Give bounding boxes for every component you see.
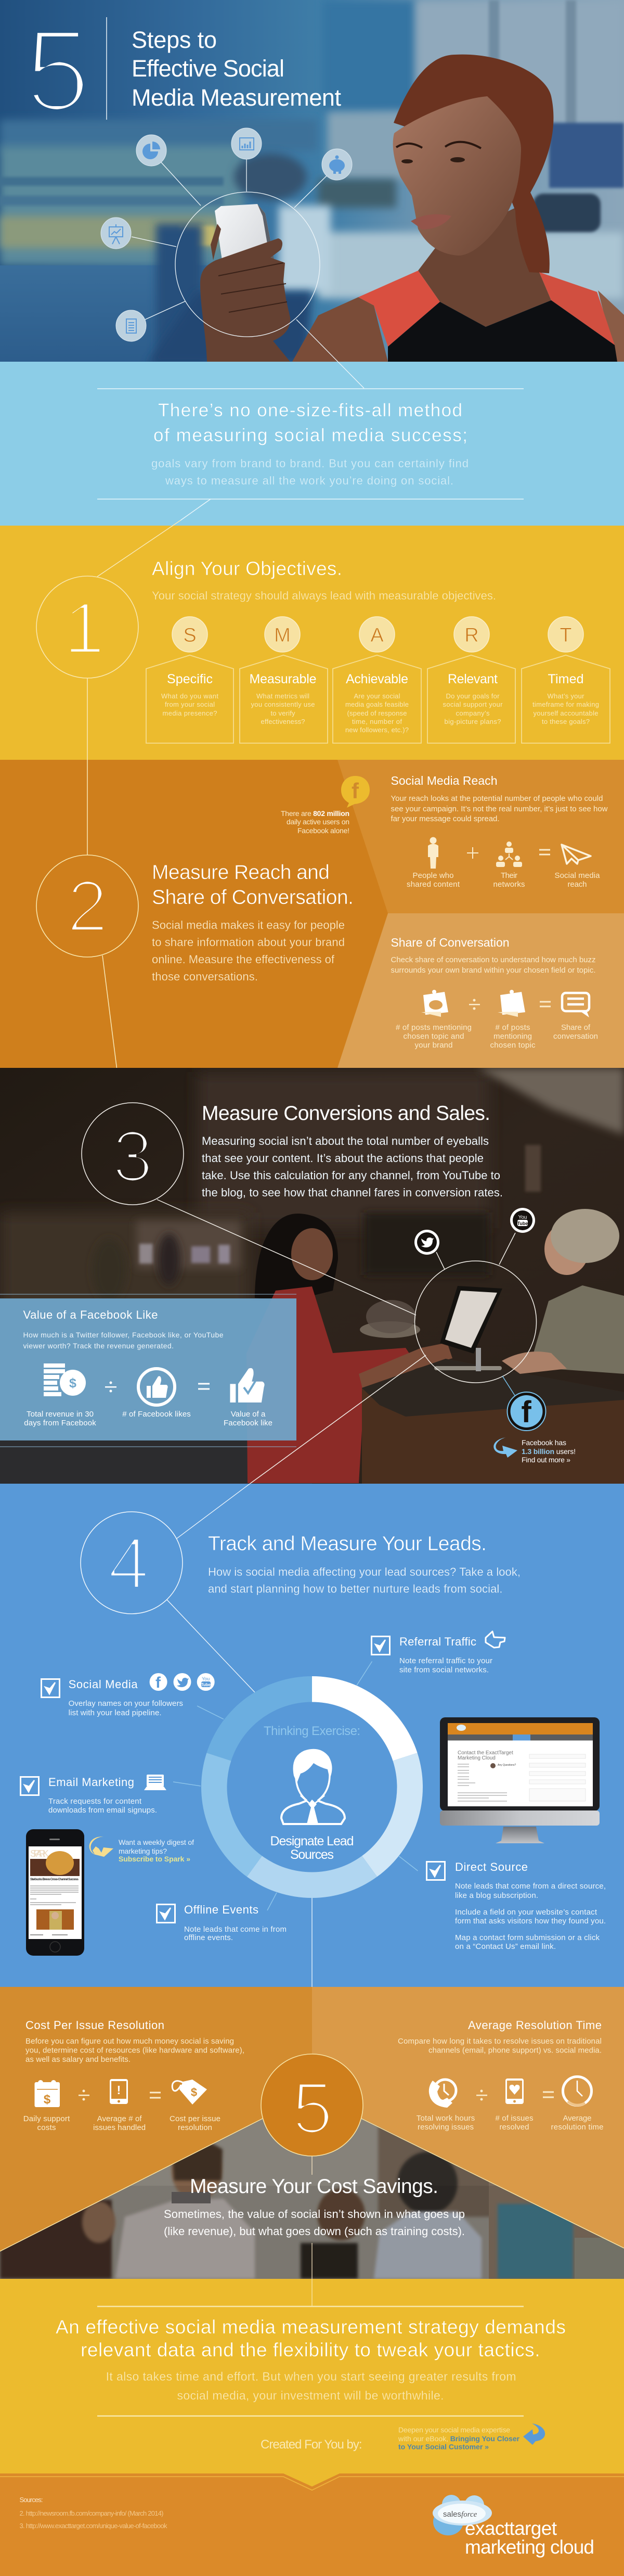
intro text block: goals vary from brand to brand. But you can certainly find — [151, 457, 469, 470]
panel: section 2 background — [0, 760, 624, 1068]
panel: value of a facebook like — [0, 1294, 296, 1447]
SMART card: specific: Specific — [167, 672, 213, 686]
callout: ebook: with our eBook, Bringing You Closer — [398, 2434, 520, 2443]
formula labels — [24, 1410, 272, 1427]
panel: section 4 background — [0, 1484, 624, 1987]
mockup: smartphone with newsletter: SPARK — [30, 1848, 49, 1859]
lead source: referral traffic: Note referral traffic to your — [399, 1656, 492, 1665]
icon: pointing hand — [486, 1631, 505, 1648]
lead source: social media: list with your lead pipeline. — [69, 1708, 162, 1717]
icon: note with cloud — [421, 990, 448, 1017]
operator: divide — [476, 2090, 487, 2100]
callout: facebook has 1.3 billion users — [493, 1437, 576, 1464]
callout: facebook has 1.3 billion users: Facebook has — [522, 1438, 566, 1447]
photo: team at whiteboard — [0, 2118, 624, 2279]
connector: centre line — [311, 2156, 313, 2307]
step 2 number circle: 2 — [67, 865, 108, 947]
text: section 2 intro: Social media makes it easy for people — [152, 919, 345, 932]
photo subject: customer in red coat — [246, 1214, 452, 1483]
formula labels — [407, 871, 600, 889]
formula labels: networks — [493, 880, 525, 889]
panel: value of a facebook like: viewer worth? Track the revenue generated. — [23, 1342, 174, 1350]
lead source: direct source: Direct Source — [455, 1860, 528, 1873]
lead source: email marketing — [21, 1775, 201, 1815]
text: designate lead sources — [270, 1834, 354, 1862]
formula labels: # of Facebook likes — [122, 1410, 191, 1419]
icon: clock — [563, 2076, 592, 2106]
logo: salesforce exacttarget marketing cloud: salesforce — [443, 2510, 477, 2519]
formula labels: conversation — [553, 1032, 598, 1041]
icon: business person — [281, 1749, 345, 1824]
callout: facebook has 1.3 billion users: Find out more » — [522, 1456, 570, 1464]
panel: value of a facebook like: Value of a Facebook Like — [23, 1308, 158, 1321]
SMART card: achievable: (speed of response — [347, 709, 407, 717]
step 2 number circle — [36, 855, 138, 957]
text: section 2 intro — [152, 919, 345, 983]
diagonal line right of photo — [361, 2119, 624, 2248]
title: Steps to — [132, 27, 217, 53]
checkbox — [426, 1862, 445, 1880]
callout: spark subscribe: Subscribe to Spark » — [119, 1855, 190, 1863]
panel: average resolution time: channels (email, phone support) vs. social media. — [428, 2046, 602, 2055]
lead source: offline events: Offline Events — [184, 1903, 258, 1916]
icon: twitter — [414, 1230, 439, 1255]
panel: section 1 background — [0, 526, 624, 760]
title: Media Measurement — [132, 84, 341, 111]
icon: youtube: You — [518, 1215, 527, 1220]
formula labels: mentioning — [493, 1032, 532, 1041]
operator: equals — [540, 1002, 551, 1006]
step 1 number circle — [36, 576, 138, 678]
chart: five lead-source donut ring — [201, 1676, 423, 1898]
photo subject: tablet on stand — [440, 1286, 502, 1371]
formula labels: costs — [37, 2123, 56, 2132]
icon: thumbs up in circle — [138, 1369, 175, 1405]
connector lines between hero and step 2 — [87, 499, 211, 1103]
panel: average resolution time: Average Resolution Time — [468, 2019, 602, 2032]
heading: track and measure: Track and Measure Your Leads. — [208, 1533, 487, 1555]
diagonal line left of photo — [0, 2119, 263, 2251]
heading: measure reach: Share of Conversation. — [152, 886, 354, 909]
connector: closing centre line — [311, 2279, 313, 2307]
formula labels: Total revenue in 30 — [27, 1410, 94, 1419]
photo subject: phone held in hand — [200, 204, 290, 362]
lead source: referral traffic: Referral Traffic — [399, 1635, 476, 1648]
icon: laptop — [144, 1775, 166, 1790]
step 4 number circle — [81, 1512, 183, 1614]
SMART card: relevant: company’s — [456, 709, 490, 717]
SMART letter circles — [172, 617, 583, 652]
text: section 5 intro: (like revenue), but what goes down (such as training costs). — [164, 2225, 465, 2238]
photo subject: barista — [502, 1209, 624, 1374]
text: section 3 intro: Measuring social isn’t about the total number of eyeballs — [202, 1134, 489, 1147]
SMART card: achievable: new followers, etc.)? — [345, 726, 409, 734]
lead source: offline events: offline events. — [184, 1933, 233, 1942]
callout: facebook users: There are 802 million — [281, 809, 349, 818]
checkbox — [157, 1905, 175, 1922]
title — [25, 5, 341, 136]
text: section 2 intro: online. Measure the effectiveness of — [152, 953, 335, 966]
lead source: direct source: like a blog subscription. — [455, 1891, 538, 1900]
SMART card: relevant: Relevant — [448, 672, 498, 686]
operator: divide — [105, 1381, 116, 1393]
logo: salesforce exacttarget marketing cloud — [433, 2495, 594, 2558]
lead source: social media — [42, 1673, 224, 1719]
SMART card: measurable: Measurable — [250, 672, 316, 686]
callout: ebook: Deepen your social media expertise — [398, 2426, 510, 2434]
SMART card: timed: Timed — [548, 672, 583, 686]
icon: phone with alert — [110, 2079, 128, 2104]
formula labels: days from Facebook — [24, 1419, 96, 1427]
icon: piggy bank — [322, 149, 352, 180]
icon: clipboard — [116, 310, 146, 341]
operator: divide — [469, 999, 480, 1010]
icon: stack of coins: $ — [69, 1376, 76, 1391]
formula labels: issues handled — [93, 2123, 146, 2132]
panel: social media reach: Your reach looks at the potential number of people who could — [391, 794, 603, 803]
text: closing statement: An effective social media measurement strategy demands — [56, 2316, 566, 2338]
SMART letter circles: S — [183, 624, 197, 646]
SMART card: timed: What’s your — [547, 692, 584, 700]
formula labels: # of posts mentioning — [396, 1023, 472, 1032]
icon: network of people — [496, 841, 522, 867]
icon: youtube — [197, 1673, 215, 1691]
step 4 number circle: 4 — [108, 1522, 149, 1604]
heading: measure reach — [152, 861, 354, 909]
SMART card: relevant: Do your goals for — [446, 692, 500, 700]
formula labels: Average # of — [97, 2114, 142, 2123]
formula labels: Their — [501, 871, 517, 880]
SMART card: relevant: big-picture plans? — [444, 718, 501, 725]
text: section 5 intro: Sometimes, the value of social isn’t shown in what goes up — [164, 2208, 465, 2221]
panel: average resolution time — [398, 2019, 603, 2132]
text: designate lead sources: Sources — [290, 1847, 334, 1862]
callout: facebook users — [281, 776, 370, 835]
text: section 3 intro: that see your content. It’s about the actions that people — [202, 1152, 484, 1165]
diagram: tablet circle and connectors — [157, 1200, 537, 1483]
formula labels: your brand — [415, 1041, 452, 1050]
icon: youtube — [510, 1208, 535, 1233]
SMART card: achievable: Achievable — [346, 672, 408, 686]
intro text block: ways to measure all the work you’re doing on social. — [165, 474, 453, 487]
panel: social media reach: Social Media Reach — [391, 774, 497, 787]
icon: presentation board — [101, 218, 131, 249]
formula labels: chosen topic and — [404, 1032, 464, 1041]
text: closing statement: relevant data and the flexibility to tweak your tactics. — [81, 2339, 540, 2361]
formula labels: Daily support — [23, 2114, 70, 2123]
SMART card: specific: media presence? — [162, 709, 217, 717]
heading: align your objectives: Align Your Objectives. — [152, 558, 342, 579]
intro text block — [97, 389, 524, 499]
panel: closing band — [0, 2279, 624, 2486]
callout: ebook — [398, 2424, 545, 2451]
SMART letter circles: M — [274, 624, 291, 646]
icon: thumbs up with check — [230, 1368, 265, 1402]
formula labels: Total work hours — [417, 2114, 475, 2123]
icon: youtube: Tube — [517, 1221, 528, 1226]
SMART card: achievable — [333, 655, 421, 743]
step 1 number circle: 1 — [64, 587, 105, 669]
text: section 3 intro: take. Use this calculation for any channel, from YouTube to — [202, 1169, 500, 1182]
step 5 number circle: 5 — [292, 2067, 333, 2149]
icon: facebook: f — [155, 1674, 161, 1691]
arrow: yellow to newsletter — [89, 1837, 113, 1857]
text: section 3 intro: the blog, to see how that channel fares in conversion rates. — [202, 1186, 503, 1199]
panel: cost per issue resolution: Before you can figure out how much money social is saving — [25, 2037, 234, 2046]
step 5 number circle — [261, 2054, 363, 2156]
SMART card: measurable: to verify — [270, 709, 295, 717]
formula labels — [23, 2114, 220, 2132]
panel: cost per issue resolution: you, determine cost of resources (like hardware and software), — [25, 2046, 244, 2055]
formula labels: shared content — [407, 880, 460, 889]
SMART letter circles: A — [370, 624, 384, 646]
formula labels: chosen topic — [490, 1041, 536, 1050]
formula labels — [417, 2114, 603, 2132]
SMART card: measurable: effectiveness? — [261, 718, 305, 725]
icon: speech bubble — [562, 993, 589, 1017]
lead source: direct source: on a “Contact Us” email link. — [455, 1942, 556, 1951]
mockup: desktop monitor contact page — [440, 1717, 600, 1843]
panel: share of conversation: surrounds your own brand within your chosen field or topic. — [391, 966, 596, 975]
formula labels: Average — [563, 2114, 592, 2123]
callout: spark subscribe: marketing tips? — [119, 1847, 167, 1855]
formula labels: Value of a — [231, 1410, 266, 1419]
panel: share of conversation: Check share of conversation to understand how much buzz — [391, 955, 596, 964]
SMART card: relevant — [427, 655, 515, 743]
lead source: direct source: Map a contact form submission or a click — [455, 1933, 600, 1942]
step 3 number circle: 3 — [112, 1115, 153, 1197]
icon: stack of coins — [44, 1363, 86, 1396]
formula labels: # of posts — [495, 1023, 530, 1032]
operator: equals — [543, 2092, 554, 2097]
icon: paper plane — [562, 845, 591, 864]
callout: spark subscribe: Want a weekly digest of — [119, 1838, 194, 1846]
operator: equals — [150, 2093, 161, 2098]
lead source: direct source: Include a field on your website’s contact — [455, 1908, 597, 1917]
text: section 2 intro: those conversations. — [152, 970, 258, 983]
step 3 number circle — [82, 1103, 184, 1205]
panel: section 5 background — [0, 1987, 624, 2279]
connectors: step 4 — [167, 1483, 312, 2054]
checkbox — [371, 1636, 390, 1655]
lead source: direct source — [399, 1856, 606, 1951]
icon: phone with heart — [505, 2078, 524, 2104]
mockup: desktop monitor contact page: Any Questions? — [498, 1764, 516, 1767]
intro text block: There’s no one-size-fits-all method — [158, 400, 462, 420]
text: section 4 intro: How is social media affecting your lead sources? Take a look, — [208, 1565, 521, 1578]
icon: facebook: f — [521, 1395, 531, 1429]
panel: social media reach: far your message could spread. — [391, 814, 499, 823]
formula labels: People who — [413, 871, 453, 880]
text: sources: 3. http://www.exacttarget.com/unique-value-of-facebook — [20, 2522, 167, 2530]
lead source: email marketing: downloads from email signups. — [48, 1806, 157, 1815]
heading: measure your cost savings: Measure Your Cost Savings. — [190, 2175, 438, 2198]
text: section 4 intro — [208, 1565, 521, 1596]
SMART card: measurable: What metrics will — [256, 692, 309, 700]
SMART card: timed — [522, 655, 610, 743]
text: closing statement: social media, your investment will be worthwhile. — [177, 2389, 444, 2402]
title: Effective Social — [132, 55, 284, 82]
text: sources: 2. http://newsroom.fb.com/company-info/ (March 2014) — [20, 2509, 163, 2517]
icon: youtube: You — [202, 1676, 210, 1681]
icon: pie chart — [136, 135, 166, 166]
text: closing statement — [56, 2306, 566, 2416]
text: section 2 intro: to share information about your brand — [152, 936, 345, 949]
operator: plus — [467, 847, 478, 859]
formula labels: Social media — [554, 871, 600, 880]
icon: youtube: Tube — [201, 1682, 211, 1687]
panel: cost per issue resolution: Cost Per Issue Resolution — [25, 2019, 164, 2032]
icon: facebook — [150, 1673, 167, 1691]
text: section 1 intro: Your social strategy should always lead with measurable objectives. — [152, 589, 496, 602]
text: section 5 intro — [164, 2208, 465, 2238]
callout: ebook: to Your Social Customer » — [398, 2443, 489, 2451]
photo subject: counter — [360, 1300, 624, 1484]
logo: salesforce exacttarget marketing cloud: exacttarget — [465, 2518, 557, 2539]
lead source: email marketing: Track requests for content — [48, 1797, 142, 1806]
callout: facebook users: daily active users on — [287, 818, 349, 826]
SMART card: timed: yourself accountable — [534, 709, 598, 717]
heading: measure conversions: Measure Conversions and Sales. — [202, 1102, 490, 1125]
panel: share of conversation — [391, 936, 598, 1050]
lead source: referral traffic — [357, 1631, 505, 1685]
text: section 4 intro: and start planning how to better nurture leads from social. — [208, 1582, 502, 1596]
text: sources: Sources: — [20, 2496, 43, 2504]
icon: price tag — [172, 2080, 207, 2105]
lead source: referral traffic: site from social networks. — [399, 1665, 489, 1675]
callout: facebook has 1.3 billion users: 1.3 billion users! — [522, 1447, 576, 1456]
panel: hero photo — [0, 0, 624, 364]
SMART card: relevant: social support your — [443, 700, 503, 708]
panel: social media reach — [391, 774, 608, 889]
SMART card: specific: What do you want — [161, 692, 218, 700]
icon: person — [428, 837, 438, 869]
title: 5 — [25, 5, 90, 136]
icon: price tag: $ — [191, 2086, 197, 2099]
operator: equals — [539, 850, 550, 855]
text: created for you by: Created For You by: — [261, 2438, 362, 2452]
formula labels: resolving issues — [418, 2123, 474, 2132]
text: thinking exercise: Thinking Exercise: — [264, 1724, 360, 1738]
SMART card: timed: timeframe for making — [532, 700, 599, 708]
icon: facebook — [508, 1392, 546, 1431]
icon: phone with clock — [429, 2080, 456, 2108]
SMART card: achievable: Are your social — [354, 692, 400, 700]
callout: facebook users: f — [352, 779, 359, 803]
lead source: direct source: Note leads that come from a direct source, — [455, 1882, 606, 1891]
formula labels: resolved — [499, 2123, 529, 2132]
icon: calendar — [34, 2080, 60, 2107]
text: closing statement: It also takes time and effort. But when you start seeing greater results from — [106, 2370, 516, 2383]
SMART card: achievable: media goals feasible — [345, 700, 409, 708]
formula labels: # of issues — [495, 2114, 534, 2123]
SMART card: measurable — [240, 655, 328, 743]
panel: value of a facebook like: How much is a Twitter follower, Facebook like, or YouTube — [23, 1331, 224, 1339]
mockup: desktop monitor contact page: Marketing Cloud — [458, 1755, 496, 1761]
panel: footer — [0, 2473, 624, 2576]
panel: cost per issue resolution — [23, 2019, 244, 2132]
text: sources — [20, 2496, 167, 2530]
SMART letter circles: T — [560, 624, 572, 646]
text: designate lead sources: Designate Lead — [270, 1834, 354, 1848]
operator: divide — [79, 2090, 89, 2100]
photo subject: woman in black and red top — [292, 55, 624, 362]
icon: phone with alert: ! — [117, 2083, 121, 2097]
checkbox — [42, 1679, 59, 1698]
panel: cost per issue resolution: as well as salary and benefits. — [25, 2055, 131, 2064]
heading: measure reach: Measure Reach and — [152, 861, 330, 884]
icon: twitter — [174, 1673, 191, 1691]
SMART card: specific: from your social — [165, 700, 215, 708]
SMART letter circles: R — [464, 624, 479, 646]
intro text block: of measuring social media success; — [153, 425, 467, 445]
text: section 3 intro — [202, 1134, 503, 1199]
icon: calendar: $ — [44, 2093, 51, 2107]
SMART card: measurable: you consistently use — [251, 700, 315, 708]
icon: bar chart — [231, 128, 262, 159]
SMART card: timed: to these goals? — [542, 718, 590, 725]
SMART card: specific — [146, 655, 233, 743]
diagram: phone circle with metric icons — [101, 128, 364, 388]
formula labels: reach — [568, 880, 587, 889]
formula labels: Facebook like — [224, 1419, 272, 1427]
lead source: direct source: form that asks visitors how they found you. — [455, 1917, 606, 1925]
lead source: social media: Overlay names on your followers — [69, 1699, 183, 1708]
lead source: offline events — [157, 1893, 287, 1942]
lead source: offline events: Note leads that come in from — [184, 1925, 287, 1934]
operator: equals — [198, 1384, 210, 1389]
mockup: smartphone with newsletter — [26, 1829, 84, 1956]
panel: average resolution time: Compare how long it takes to resolve issues on traditional — [398, 2037, 602, 2046]
formula labels: resolution time — [551, 2123, 603, 2132]
panel: social media reach: see your campaign. It’s not the real number, it’s just to see how — [391, 805, 608, 813]
lead source: email marketing: Email Marketing — [48, 1776, 134, 1789]
icon: note — [498, 990, 525, 1017]
formula labels: Cost per issue — [170, 2114, 220, 2123]
formula labels — [396, 1023, 598, 1050]
callout: facebook users: Facebook alone! — [297, 826, 349, 835]
panel: intro band — [0, 362, 624, 526]
panel: share of conversation: Share of Conversation — [391, 936, 510, 949]
mockup: smartphone with newsletter: Starbucks Brews Cross-Channel Success — [30, 1878, 79, 1881]
checkbox — [21, 1777, 38, 1795]
SMART card: achievable: time, number of — [352, 718, 402, 725]
lead source: social media: Social Media — [69, 1678, 138, 1691]
panel: section 3 photo background — [0, 1068, 624, 1484]
formula labels: Share of — [561, 1023, 591, 1032]
logo: salesforce exacttarget marketing cloud: marketing cloud — [465, 2536, 594, 2558]
callout: spark subscribe — [119, 1838, 194, 1863]
mockup: desktop monitor contact page: Contact the ExactTarget — [458, 1750, 513, 1756]
formula labels: resolution — [178, 2123, 212, 2132]
